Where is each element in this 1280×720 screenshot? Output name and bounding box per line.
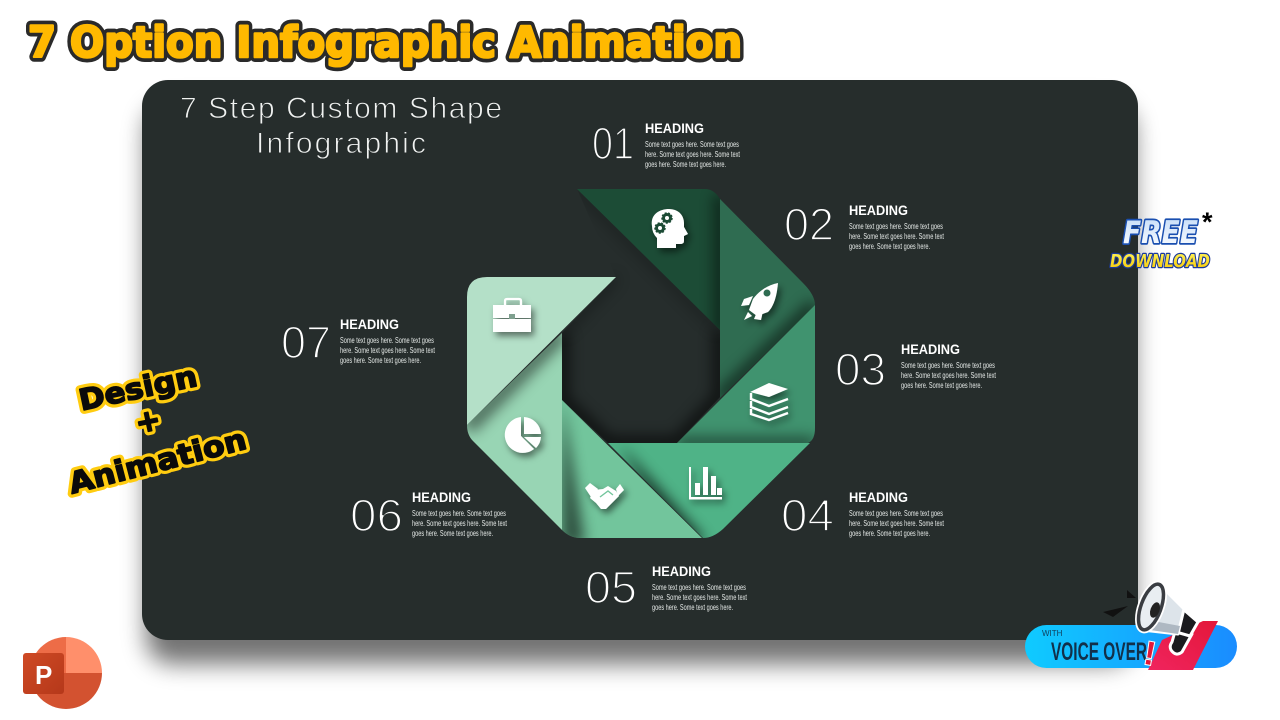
step 04: 04 (781, 490, 834, 541)
red slash (1148, 621, 1218, 670)
step 06: here. Some text goes here. Some text (412, 519, 508, 528)
badge: voice over: VOICE OVER (1051, 638, 1147, 666)
step 03: 03 (835, 344, 886, 395)
step 01 (592, 118, 741, 169)
step 05: 05 (585, 562, 637, 613)
step 05 (585, 562, 748, 613)
center hole shading (562, 324, 720, 443)
badge: voice over: ! (1141, 634, 1159, 672)
step 07: HEADING (340, 316, 399, 332)
badge: design + animation: Design (76, 359, 200, 417)
badge: free download: * (1202, 207, 1213, 237)
step 03: goes here. Some text goes here. (901, 381, 982, 390)
step 02: here. Some text goes here. Some text (849, 232, 945, 241)
step 07: 07 (281, 317, 331, 368)
segment 2: rocket icon (720, 199, 815, 398)
segment 5: handshake icon (562, 400, 702, 538)
segment 4: bar chart icon (608, 443, 810, 538)
icon: pie chart (505, 417, 541, 453)
panel: dark slide (142, 80, 1138, 664)
logo: PowerPoint (23, 637, 102, 709)
slide heading: Infographic (256, 127, 426, 160)
step 04 (781, 489, 945, 541)
step 03 (835, 341, 997, 395)
step 07: Some text goes here. Some text goes (340, 336, 434, 345)
slide heading: 7 Step Custom Shape (180, 92, 502, 125)
step 01: HEADING (645, 120, 704, 136)
badge: free download (1110, 207, 1213, 272)
main title: 7 Option Infographic Animation (28, 18, 742, 68)
main title: 7 Option Infographic Animation (28, 18, 742, 68)
step 02: HEADING (849, 202, 908, 218)
icon: briefcase (493, 299, 531, 332)
step 04: here. Some text goes here. Some text (849, 519, 945, 528)
segment 7: briefcase icon (467, 277, 616, 425)
step 06: goes here. Some text goes here. (412, 529, 493, 538)
step 06: 06 (350, 490, 403, 541)
badge: free download: FREE (1123, 215, 1198, 251)
step 05: goes here. Some text goes here. (652, 603, 733, 612)
badge: voice over: WITH (1042, 629, 1063, 638)
step 05: Some text goes here. Some text goes (652, 583, 746, 592)
step 03: Some text goes here. Some text goes (901, 361, 995, 370)
step 02: goes here. Some text goes here. (849, 242, 930, 251)
badge: design + animation: + (132, 402, 164, 441)
step 04: HEADING (849, 489, 908, 505)
icon: rocket (741, 283, 778, 320)
icon: head with gears (652, 209, 688, 248)
step 03: here. Some text goes here. Some text (901, 371, 997, 380)
step 02: Some text goes here. Some text goes (849, 222, 943, 231)
step 01: Some text goes here. Some text goes (645, 140, 739, 149)
badge: design + animation: Animation (65, 422, 250, 501)
step 06: Some text goes here. Some text goes (412, 509, 506, 518)
icon: bar chart (689, 467, 722, 500)
icon: handshake (585, 483, 624, 509)
segment 6: pie chart icon (467, 333, 562, 530)
step 01: 01 (592, 118, 634, 169)
badge: free download: DOWNLOAD (1110, 251, 1210, 272)
step 05: HEADING (652, 563, 711, 579)
logo: PowerPoint: P (35, 660, 52, 690)
step 02 (784, 199, 945, 251)
segment 1: head icon (577, 189, 720, 330)
step 04: goes here. Some text goes here. (849, 529, 930, 538)
step 06: HEADING (412, 489, 471, 505)
badge: design + animation: + (132, 402, 164, 441)
badge: design + animation: Animation (65, 422, 250, 501)
icon: megaphone (1103, 581, 1198, 654)
step 06 (350, 489, 508, 541)
badge: voice over (1025, 581, 1237, 672)
step 01: goes here. Some text goes here. (645, 160, 726, 169)
step 05: here. Some text goes here. Some text (652, 593, 748, 602)
step 07 (281, 316, 436, 368)
slide heading (180, 92, 502, 160)
step 02: 02 (784, 199, 834, 250)
step 07: here. Some text goes here. Some text (340, 346, 436, 355)
step 01: here. Some text goes here. Some text (645, 150, 741, 159)
icon: books (750, 383, 788, 420)
step 04: Some text goes here. Some text goes (849, 509, 943, 518)
segment 3: books icon (677, 305, 815, 443)
badge: design + animation (65, 359, 250, 501)
badge: design + animation: Design (76, 359, 200, 417)
step 03: HEADING (901, 341, 960, 357)
step 07: goes here. Some text goes here. (340, 356, 421, 365)
